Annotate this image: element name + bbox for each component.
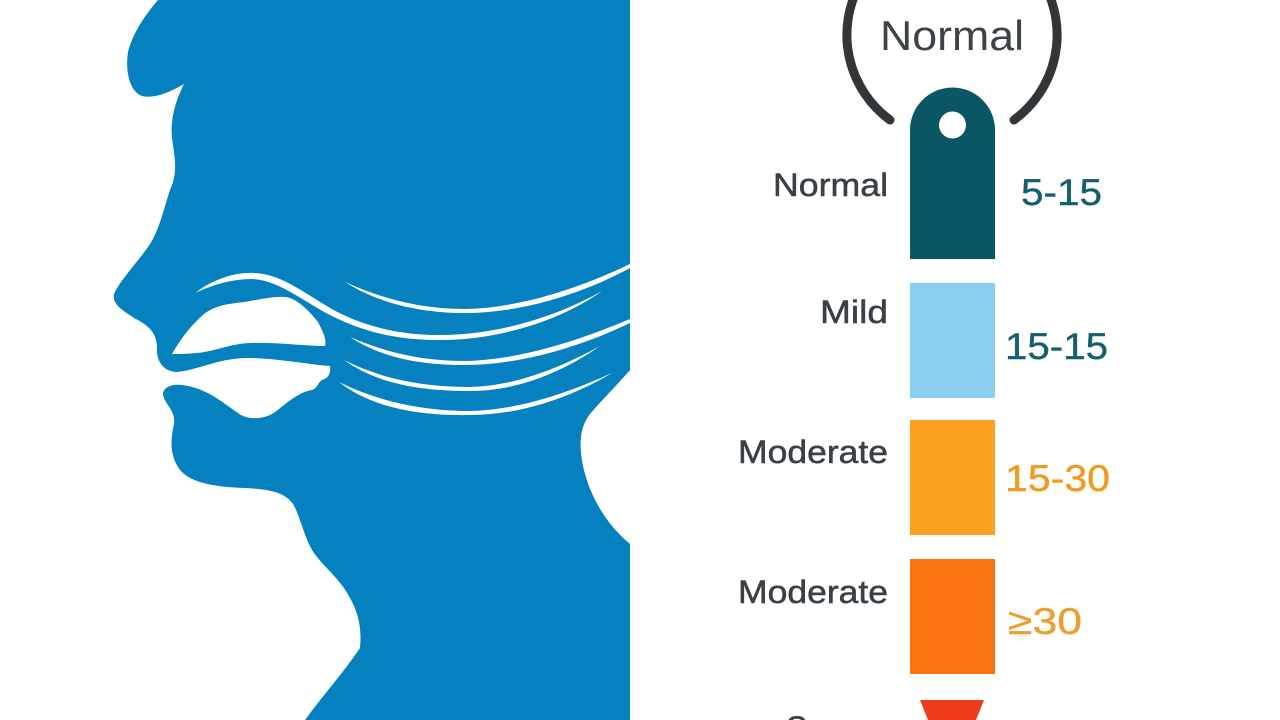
value: 15-30 [1005,458,1110,499]
label: Mild [820,294,888,330]
label: Moderate [738,434,888,470]
airflow line 5 [339,373,612,415]
airflow line 1 [195,273,602,340]
amber bar [910,420,995,535]
head profile silhouette [114,0,630,720]
severity row: mild [820,283,1108,398]
value: 5-15 [1021,172,1102,213]
value: 15-15 [1005,326,1108,367]
airflow line 2 [345,264,630,313]
orange bar [910,559,995,674]
severity row: severe [786,700,984,720]
label: Moderate [738,574,888,610]
gauge label: Normal [880,12,1024,59]
severity row: normal [773,88,1102,259]
gauge arc [847,0,1057,120]
airflow line 4 [344,346,600,391]
severity row: moderate high [738,559,1082,674]
value: ≥30 [1008,601,1082,642]
light blue bar [910,283,995,398]
mouth cavity [172,297,326,354]
panel: head silhouette with airway [114,0,630,720]
label: Normal [773,167,888,203]
airflow line 3 [350,319,630,365]
severity row: moderate [738,420,1110,535]
teal bar with pin hole [910,88,995,259]
red pointer [920,700,984,720]
